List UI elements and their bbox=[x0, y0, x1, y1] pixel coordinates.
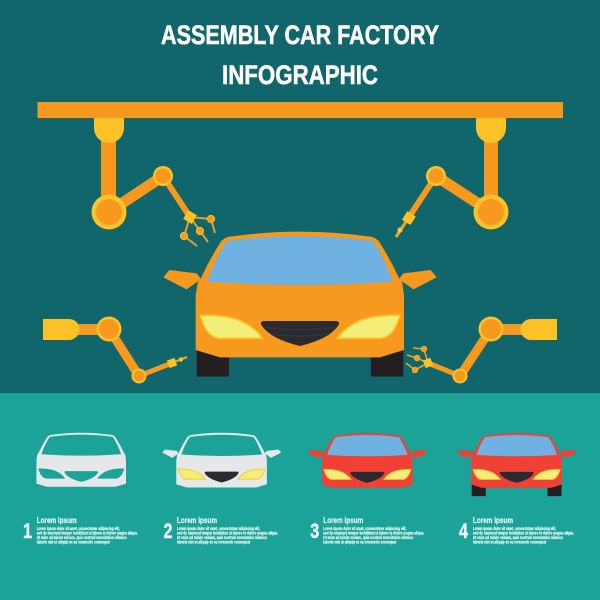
step 1 text: laboris nisi ut aliquip ex ea commodo consequat bbox=[37, 540, 110, 544]
step 4 text bbox=[459, 515, 574, 544]
step 2 text: Ut enim ad minim veniam, quis nostrud exercitation ullamco bbox=[177, 535, 267, 540]
title bbox=[161, 20, 439, 90]
step 1 text: 1 bbox=[23, 520, 32, 543]
step 1 car: white body shell bbox=[36, 433, 126, 487]
step 2 car: white with mirrors, lights and grille bbox=[162, 433, 281, 487]
step 4 text: Lorem ipsum dolor sit amet, consectetuer adipiscing elit, bbox=[473, 526, 556, 531]
step 3 text: Ut enim ad minim veniam, quis nostrud exercitation ullamco bbox=[323, 535, 414, 540]
step 1 text: Lorem ipsum dolor sit amet, consectetuer adipiscing elit, bbox=[37, 526, 120, 531]
step 2 text: Lorem ipsum bbox=[177, 515, 217, 525]
step 3 text: sed do eiusmod tempor incididunt ut labore et dolore magna aliqua. bbox=[323, 530, 424, 536]
main car: orange, front view bbox=[163, 232, 437, 377]
robot arm: top left with gripper bbox=[92, 118, 215, 246]
step 2 text: laboris nisi ut aliquip ex ea commodo consequat bbox=[177, 540, 250, 544]
step 3 text: 3 bbox=[310, 520, 319, 543]
step 3 text bbox=[310, 515, 424, 544]
step 4 text: Lorem ipsum bbox=[473, 515, 513, 525]
title: INFOGRAPHIC bbox=[222, 60, 378, 90]
overhead rail bbox=[38, 102, 563, 118]
background: factory floor bbox=[0, 0, 600, 393]
step 1 text: Ut enim ad minim veniam, quis nostrud exercitation ullamco bbox=[37, 535, 127, 540]
step 1 text: Lorem ipsum bbox=[37, 515, 77, 525]
step 4 text: laboris nisi ut aliquip ex ea commodo consequat bbox=[473, 540, 546, 544]
title: ASSEMBLY CAR FACTORY bbox=[161, 20, 439, 50]
step 3 text: Lorem ipsum dolor sit amet, consectetuer adipiscing elit, bbox=[323, 526, 406, 531]
robot arm: lower right with gripper bbox=[406, 316, 557, 384]
background: steps panel bbox=[0, 393, 600, 600]
step 2 text: Lorem ipsum dolor sit amet, consectetuer adipiscing elit, bbox=[177, 526, 260, 531]
step 4 text: 4 bbox=[459, 520, 468, 543]
step 1 text bbox=[23, 515, 138, 544]
robot arm: top right with tool bbox=[396, 118, 508, 237]
step 2 text: 2 bbox=[164, 520, 172, 543]
step 3 text: laboris nisi ut aliquip ex ea commodo consequat bbox=[323, 540, 397, 544]
step 3 text: Lorem ipsum bbox=[323, 515, 364, 525]
step 2 text: sed do eiusmod tempor incididunt ut labore et dolore magna aliqua. bbox=[177, 530, 278, 536]
step 4 car: red with wheels bbox=[457, 433, 576, 496]
step 2 text bbox=[164, 515, 278, 544]
step 4 text: Ut enim ad minim veniam, quis nostrud exercitation ullamco bbox=[473, 535, 563, 540]
step 3 car: painted red without wheels bbox=[308, 433, 427, 488]
robot arm: lower left with tool bbox=[43, 316, 187, 384]
step 1 text: sed do eiusmod tempor incididunt ut labore et dolore magna aliqua. bbox=[37, 530, 138, 536]
